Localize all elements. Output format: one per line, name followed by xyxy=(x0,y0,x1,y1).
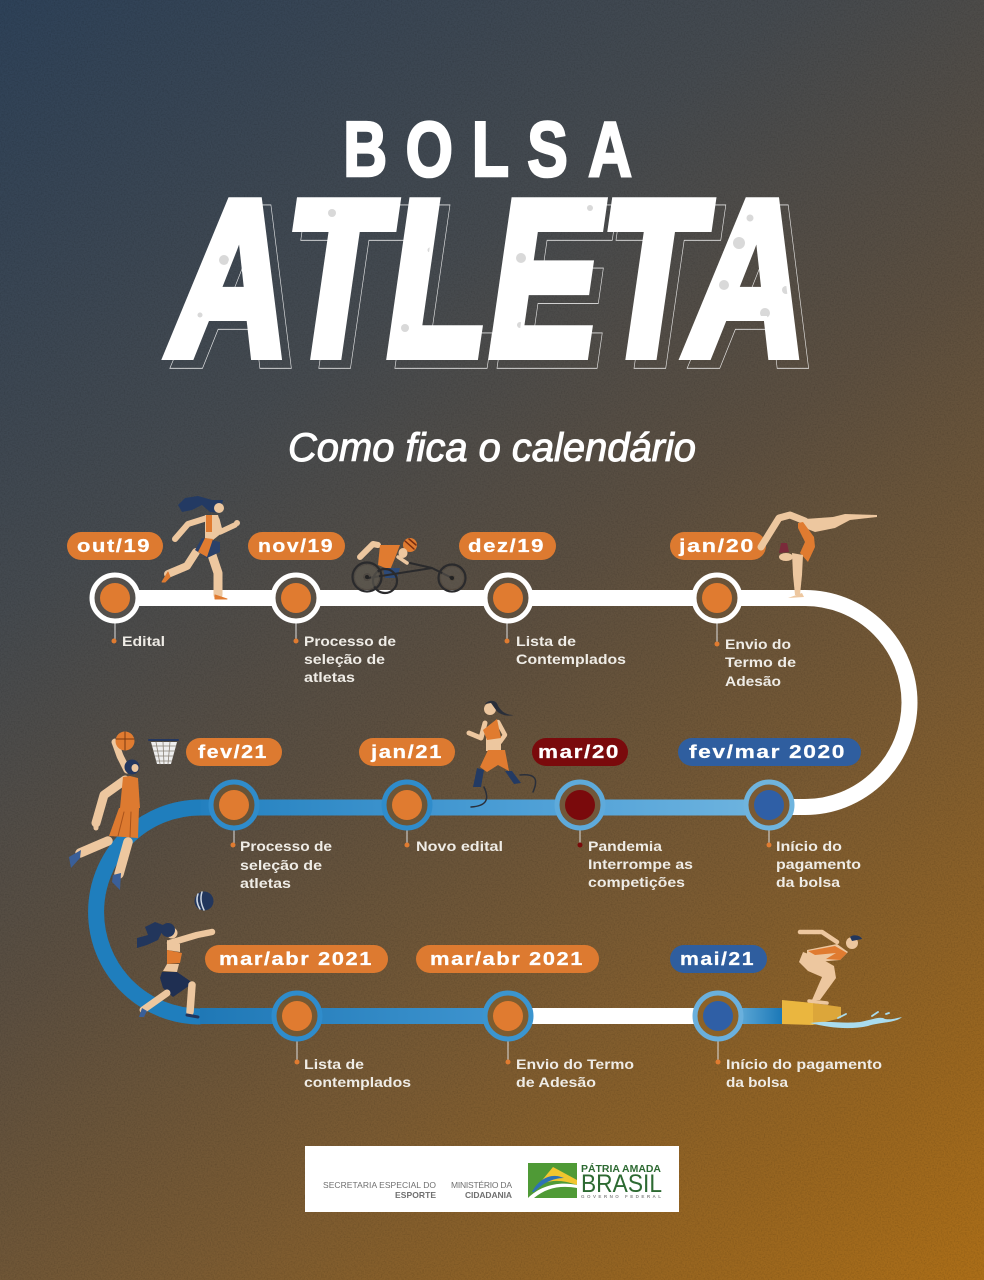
milestone: mar/abr 2021 Lista de contemplados: Lista de xyxy=(304,1056,364,1072)
milestone: fev/21 Processo de seleção xyxy=(186,738,332,891)
patria amada brasil wordmark: GOVERNO FEDERAL xyxy=(581,1194,661,1199)
milestone: nov/19 Processo de seleção xyxy=(248,532,396,685)
icon: runner xyxy=(162,496,240,599)
timeline track xyxy=(96,598,910,1016)
milestone: mar/20 Pandemia: competições xyxy=(588,874,685,890)
icon: wheelchair racer xyxy=(352,538,466,593)
milestone: fev/mar 2020 Início do pagamento xyxy=(678,738,861,890)
milestone: jan/21 Novo edital xyxy=(359,738,503,854)
milestone: mar/20 Pandemia: Interrompe as xyxy=(588,856,693,872)
milestone: mar/abr 2021 Envio do Termo xyxy=(416,945,634,1090)
milestone: fev/21 Processo de seleção: seleção de xyxy=(240,857,322,873)
milestone: mar/20 Pandemia: Pandemia xyxy=(588,838,662,854)
secretaria text: ESPORTE xyxy=(395,1190,436,1200)
icon: swimmer on starting block xyxy=(782,932,902,1028)
milestone: out/19 Edital: Edital xyxy=(122,633,165,649)
milestone: fev/mar 2020 Início do pagamento: Início do xyxy=(776,838,842,854)
milestone: mar/abr 2021 Envio do Termo: Envio do Termo xyxy=(516,1056,634,1072)
icon: para runner with blades xyxy=(469,701,536,807)
milestone: mar/abr 2021 Envio do Termo: de Adesão xyxy=(516,1074,596,1090)
milestone: dez/19 Lista de Contemplados xyxy=(459,532,626,667)
secretaria text xyxy=(323,1180,512,1200)
milestone: jan/20 Envio do Termo: jan/20 xyxy=(678,535,755,556)
milestone: out/19 Edital xyxy=(67,532,165,649)
milestone: mai/21 Início do pagamento: Início do pagamento xyxy=(726,1056,882,1072)
patria amada brasil wordmark: PÁTRIA AMADA xyxy=(581,1162,661,1175)
milestone: fev/21 Processo de seleção: fev/21 xyxy=(198,741,268,762)
milestone: mar/abr 2021 Lista de contemplados xyxy=(205,945,411,1090)
milestone: mai/21 Início do pagamento: da bolsa xyxy=(726,1074,788,1090)
secretaria text: CIDADANIA xyxy=(465,1190,512,1200)
title: ATLETA xyxy=(161,197,809,369)
title: ATLETA: ATLETA xyxy=(168,155,807,403)
milestone: jan/21 Novo edital: jan/21 xyxy=(370,741,443,762)
secretaria text: SECRETARIA ESPECIAL DO xyxy=(323,1180,436,1190)
milestone: nov/19 Processo de seleção: nov/19 xyxy=(258,535,334,556)
secretaria text: MINISTÉRIO DA xyxy=(451,1180,512,1190)
milestone: out/19 Edital: out/19 xyxy=(77,535,151,556)
milestone: dez/19 Lista de Contemplados: dez/19 xyxy=(468,535,545,556)
milestone: jan/21 Novo edital: Novo edital xyxy=(416,838,503,854)
milestone: fev/21 Processo de seleção: Processo de xyxy=(240,838,332,854)
milestone: mar/20 Pandemia xyxy=(532,738,693,890)
icon: volleyball player xyxy=(137,892,214,1017)
milestone: nov/19 Processo de seleção: seleção de xyxy=(304,651,385,667)
milestone: nov/19 Processo de seleção: atletas xyxy=(304,669,355,685)
milestone: dez/19 Lista de Contemplados: Contemplados xyxy=(516,651,626,667)
milestone: mar/abr 2021 Envio do Termo: mar/abr 2021 xyxy=(430,948,584,969)
milestone: fev/21 Processo de seleção: atletas xyxy=(240,875,291,891)
patria amada brasil wordmark: BRASIL xyxy=(581,1170,662,1198)
milestone: jan/20 Envio do Termo: Envio do xyxy=(725,636,791,652)
milestone: jan/20 Envio do Termo: Adesão xyxy=(725,673,781,689)
milestone: fev/mar 2020 Início do pagamento: da bolsa xyxy=(776,874,840,890)
icon: brasil flag mark xyxy=(528,1163,577,1198)
milestone: fev/mar 2020 Início do pagamento: fev/mar 2020 xyxy=(689,741,846,762)
milestone: mai/21 Início do pagamento xyxy=(670,945,882,1090)
milestone: dez/19 Lista de Contemplados: Lista de xyxy=(516,633,576,649)
milestone: jan/20 Envio do Termo xyxy=(670,532,796,689)
milestone: mar/abr 2021 Lista de contemplados: mar/abr 2021 xyxy=(219,948,373,969)
milestone: nov/19 Processo de seleção: Processo de xyxy=(304,633,396,649)
subtitle: Como fica o calendário xyxy=(288,426,696,470)
icon: basketball player and hoop xyxy=(69,732,178,890)
title: BOLSA: BOLSA xyxy=(343,106,632,193)
logo panel xyxy=(305,1146,679,1212)
milestone: jan/20 Envio do Termo: Termo de xyxy=(725,654,796,670)
milestone: mar/abr 2021 Lista de contemplados: contemplados xyxy=(304,1074,411,1090)
icon: gymnast xyxy=(761,514,877,598)
milestone: mai/21 Início do pagamento: mai/21 xyxy=(680,948,755,969)
milestone: fev/mar 2020 Início do pagamento: pagamento xyxy=(776,856,861,872)
milestone: mar/20 Pandemia: mar/20 xyxy=(538,741,620,762)
